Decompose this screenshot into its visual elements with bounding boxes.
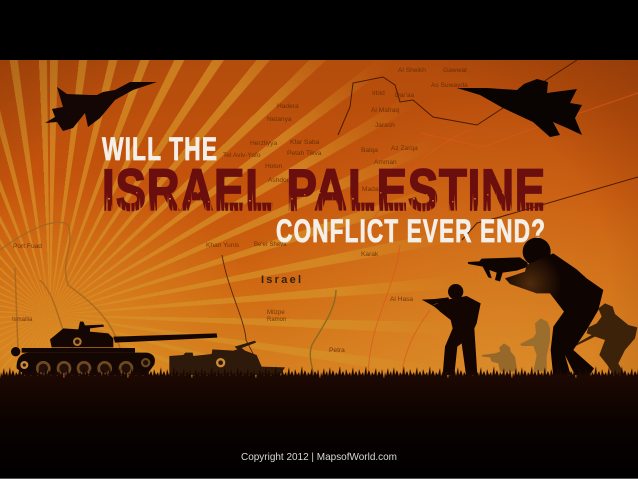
map place labels: Al Sheikh xyxy=(398,67,426,74)
sunburst rays xyxy=(0,60,420,375)
map place labels: Amman xyxy=(374,159,397,166)
map place labels: Hadera xyxy=(277,103,299,110)
map place labels: Petah Tikva xyxy=(287,150,322,157)
map lines: borders and roads xyxy=(0,60,638,376)
map place labels: Kfar Saba xyxy=(290,139,320,146)
soldier: large foreground rifleman xyxy=(468,238,603,377)
icon: right fighter jet xyxy=(457,79,582,137)
map place labels: Ashdod xyxy=(268,177,291,184)
map place labels: Jarash xyxy=(375,122,395,129)
tank wheels xyxy=(20,358,150,376)
icon: tank silhouette xyxy=(11,322,217,376)
map place labels: Az Zarqa xyxy=(391,145,418,152)
map place labels: Holon xyxy=(265,163,283,170)
icon: armoured truck silhouette xyxy=(169,341,285,375)
background: orange sunburst map xyxy=(0,60,638,380)
soldier: faded running xyxy=(520,318,550,372)
map place labels: Tel Aviv-Yafo xyxy=(223,152,261,159)
map place labels: Balqa xyxy=(361,147,378,154)
map place labels: Karak xyxy=(361,251,379,258)
map place labels: Petra xyxy=(329,347,345,354)
map place labels: Dar'aa xyxy=(395,92,415,99)
background soldiers xyxy=(482,303,637,375)
map place labels: Al Hasa xyxy=(390,296,413,303)
map place labels: Ismailia xyxy=(12,317,33,323)
map place labels: Port Fuad xyxy=(13,243,42,250)
soldier: faded kneeling xyxy=(482,343,517,372)
edge vignette xyxy=(0,60,638,380)
icon: left fighter jet xyxy=(45,82,157,131)
ground and grass silhouette xyxy=(0,365,638,478)
map place labels: Al Mafraq xyxy=(371,107,400,114)
map place labels: As Suwayda xyxy=(431,82,468,89)
map place labels: Ramon xyxy=(267,317,286,323)
map place labels: Madaba xyxy=(362,186,386,193)
map place labels: Herzliyya xyxy=(250,140,277,147)
map place labels: Gawwat xyxy=(443,67,467,74)
soldier: dark brown crouching xyxy=(570,303,637,375)
map place labels: Be'er Sheva xyxy=(254,242,287,248)
map place labels: Irbid xyxy=(372,90,385,97)
map place labels: Mitzpe xyxy=(267,310,285,316)
map place labels: Netanya xyxy=(267,116,292,123)
copyright line: Copyright 2012 | MapsofWorld.com xyxy=(241,452,397,463)
soldier: standing rifleman xyxy=(422,284,481,375)
map label: Israel: Israel xyxy=(261,274,301,286)
map place labels xyxy=(12,67,468,354)
heading: Will the: WILL THE xyxy=(102,131,218,167)
map place labels: Khan Yunis xyxy=(206,242,240,249)
